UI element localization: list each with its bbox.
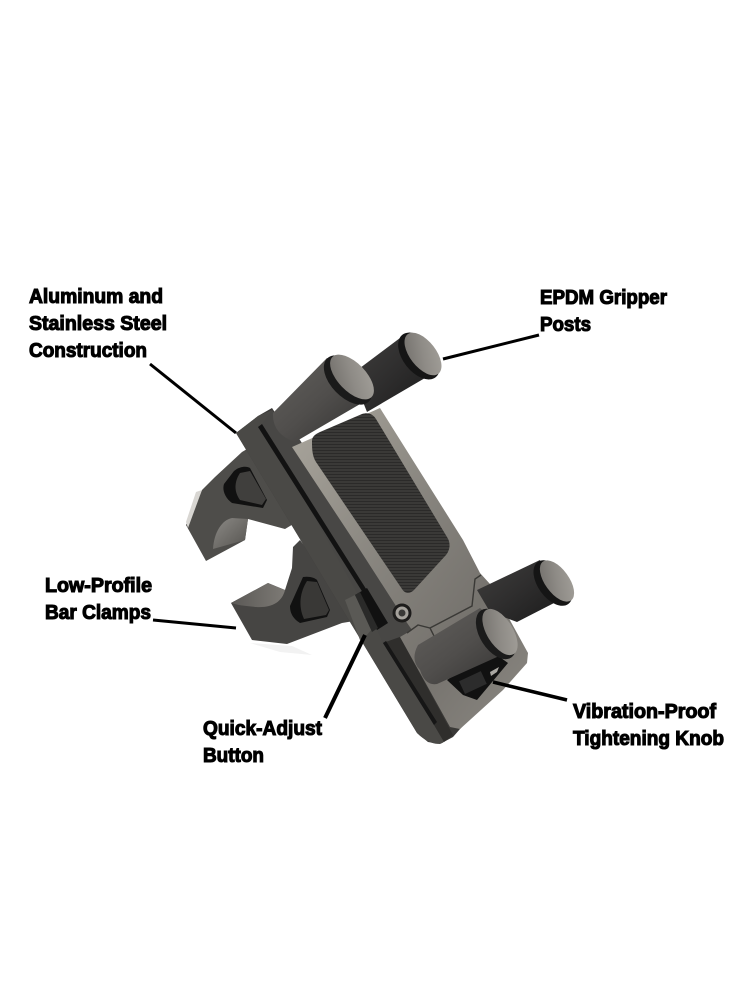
- leader line: bar clamps: [153, 620, 236, 628]
- leader line: construction: [150, 364, 236, 433]
- silver face: [292, 408, 528, 729]
- grip pad: [312, 413, 450, 593]
- label: low-profile bar clamps: [45, 575, 152, 624]
- label: aluminum and stainless steel construction: Construction: [29, 340, 147, 362]
- soft shadow: [250, 643, 312, 655]
- label: vibration-proof tightening knob: [573, 701, 724, 750]
- silhouette underlay: [236, 408, 528, 744]
- label: aluminum and stainless steel construction: [29, 286, 167, 362]
- label: quick-adjust button: [203, 718, 322, 767]
- label: vibration-proof tightening knob: Tightening Knob: [573, 728, 724, 750]
- label: quick-adjust button: Button: [203, 745, 264, 767]
- label: aluminum and stainless steel construction: Stainless Steel: [29, 313, 167, 335]
- label: EPDM gripper posts: EPDM Gripper: [540, 287, 667, 309]
- screw: [392, 604, 412, 622]
- label: vibration-proof tightening knob: Vibration-Proof: [573, 701, 716, 723]
- label: EPDM gripper posts: Posts: [540, 314, 591, 336]
- label: low-profile bar clamps: Bar Clamps: [45, 602, 151, 624]
- leader line: quick-adjust button: [325, 635, 365, 718]
- rear lower gripper post: [477, 553, 581, 622]
- leader line: gripper posts: [443, 335, 539, 359]
- tightening knob: [447, 650, 508, 700]
- face cut line: [407, 575, 481, 648]
- quick-adjust button: [345, 588, 388, 640]
- inner band: [262, 410, 420, 643]
- label: aluminum and stainless steel construction: Aluminum and: [29, 286, 163, 308]
- main body plate: [236, 408, 528, 744]
- upper bar clamp: [186, 440, 300, 561]
- gap line upper: [258, 424, 368, 596]
- leader line: tightening knob: [493, 682, 567, 700]
- label: quick-adjust button: Quick-Adjust: [203, 718, 322, 740]
- outer band: [236, 410, 445, 744]
- lower gap line: [383, 641, 437, 725]
- lower inner band: [383, 637, 453, 742]
- product: phone mount: [186, 325, 581, 744]
- label: low-profile bar clamps: Low-Profile: [45, 575, 152, 597]
- label: EPDM gripper posts: [540, 287, 667, 336]
- lower bar clamp: [231, 540, 360, 644]
- front upper gripper post: [273, 347, 382, 442]
- front lower gripper post: [414, 602, 525, 684]
- rear upper gripper post: [352, 325, 449, 412]
